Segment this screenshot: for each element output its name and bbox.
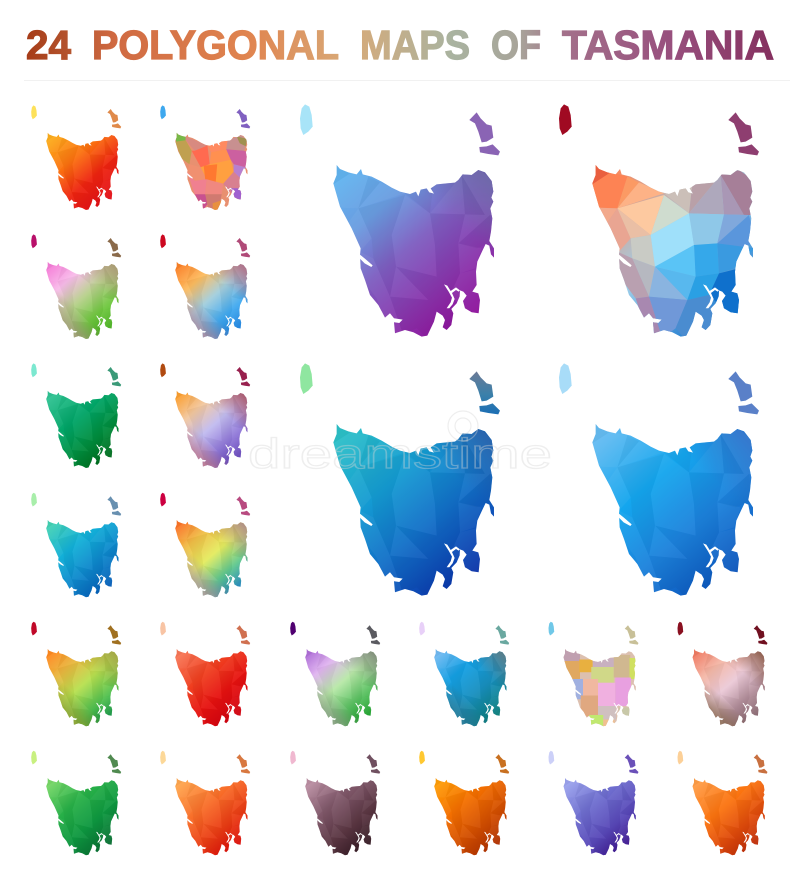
large map: orange to blue facets	[559, 104, 759, 340]
map: row 4 col 2, orange yellow teal	[160, 493, 250, 598]
map: row 3 col 1, green	[31, 363, 121, 469]
large map: teal to deep blue	[300, 363, 500, 597]
map: row 6 col 3, dusty plum	[290, 751, 380, 856]
map: row 6 col 4, amber	[419, 751, 509, 856]
map: row 6 col 2, orange red	[160, 751, 250, 856]
map: row 5 col 3, violet to green	[290, 622, 380, 727]
map: row 4 col 1, teal to blue	[31, 493, 121, 598]
map: row 5 col 1, orange to green	[31, 622, 121, 727]
map: row 1 col 2, multicolour	[160, 105, 250, 211]
watermark	[248, 411, 552, 477]
title: POLYGONAL	[92, 22, 339, 68]
map: row 5 col 5, pastel mosaic	[548, 622, 638, 727]
watermark: dreamstime	[248, 430, 552, 477]
map: row 6 col 6, orange	[678, 751, 768, 856]
map: row 2 col 1, pink to green	[31, 234, 121, 340]
title: 24	[26, 22, 71, 68]
map: row 3 col 2, orange to violet	[160, 363, 250, 469]
map: row 6 col 5, indigo	[548, 751, 638, 856]
title: MAPS	[360, 22, 470, 68]
map: row 1 col 1, orange to red	[31, 105, 121, 211]
map: row 6 col 1, green	[31, 751, 121, 856]
map: row 2 col 2, orange to blue	[160, 234, 250, 340]
map: row 5 col 4, blue to teal	[419, 622, 509, 727]
title: OF	[491, 22, 541, 68]
title: TASMANIA	[562, 22, 774, 68]
large map: sky blue	[559, 363, 759, 597]
large map: purple	[300, 104, 500, 338]
map: row 5 col 6, coral to mauve	[678, 622, 768, 727]
map: row 5 col 2, red	[160, 622, 250, 727]
title	[26, 22, 774, 68]
